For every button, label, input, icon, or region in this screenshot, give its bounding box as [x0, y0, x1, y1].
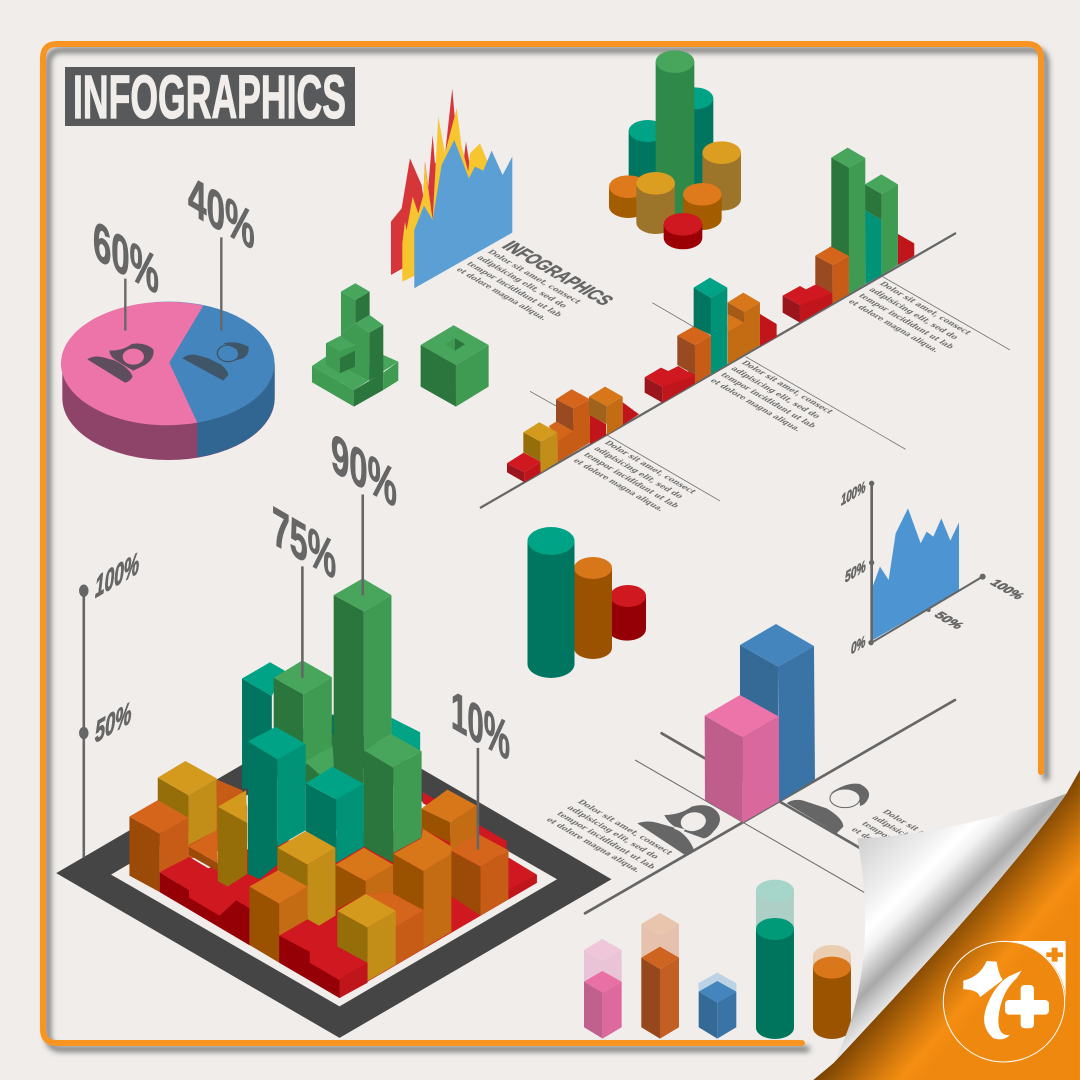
text block: man caption: et dolore magna aliqua.: [849, 826, 945, 882]
text block: infographics iso caption: INFOGRAPHICS: [497, 238, 618, 309]
left orange and yellow blocks: [129, 790, 264, 945]
label 60%: 60%: [93, 209, 159, 307]
axis lines: [585, 700, 955, 913]
label 10%: 10%: [451, 679, 510, 773]
bar set 1: [507, 387, 639, 482]
blue bar: [740, 624, 815, 803]
text block: set 2 caption: Dolor sit amet, consect: [739, 359, 836, 415]
title banner: INFOGRAPHICS: [73, 63, 346, 131]
cylinder trio: [528, 527, 646, 678]
icon: man: [787, 784, 869, 833]
text block: set 1 caption: et dolore magna aliqua.: [571, 457, 667, 513]
text block: man caption: adipisicing elit, sed do: [870, 814, 965, 869]
stick 75: [299, 566, 306, 678]
back blocks: [158, 662, 537, 998]
teal ghost cylinder: [756, 880, 794, 1039]
text block: infographics iso caption: Dolor sit amet, consect: [485, 248, 584, 305]
icon: woman on pie: [87, 343, 154, 383]
text block: infographics iso caption: adipisicing elit, sed do: [475, 254, 571, 309]
text block: man caption: tempor incididunt ut lab: [859, 820, 960, 878]
green 90 block: [334, 578, 391, 847]
title banner: [65, 63, 355, 131]
pink ghost bar: [584, 939, 622, 1039]
text block: set 2 caption: tempor incididunt ut lab: [718, 371, 819, 429]
dark base: [56, 714, 612, 1038]
text block: set 3 caption: [846, 280, 978, 356]
white inset: [111, 748, 557, 1006]
label 50% scale: 50%: [95, 696, 131, 750]
blue ghost bar: [698, 973, 736, 1039]
orange ghost cylinder: [813, 945, 851, 1039]
right orange blocks: [422, 790, 537, 916]
label 75%: 75%: [272, 495, 336, 592]
blue area chart: 100%: [841, 478, 866, 510]
text block: set 1 caption: [571, 439, 703, 515]
text block: set 3 caption: Dolor sit amet, consect: [877, 280, 974, 336]
blue area chart: [841, 478, 1028, 658]
text block: infographics iso caption: tempor incididunt ut lab: [464, 260, 565, 318]
stick 10: [474, 748, 481, 850]
pie top blue slice: [62, 302, 274, 425]
label 40%: 40%: [188, 164, 255, 263]
text block: woman caption: [544, 798, 679, 876]
text block: woman caption: tempor incididunt ut lab: [554, 810, 659, 870]
text block: set 3 caption: tempor incididunt ut lab: [856, 292, 957, 350]
text block: set 1 caption: Dolor sit amet, consect: [602, 439, 699, 495]
teal block center: [306, 767, 364, 863]
text block: set 3 caption: et dolore magna aliqua.: [846, 298, 942, 354]
label 100% scale: 100%: [95, 546, 139, 605]
text block: set 1 caption: adipisicing elit, sed do: [592, 445, 687, 500]
bar group row: [507, 148, 1010, 501]
text block: man caption: Dolor sit amet, consect: [880, 808, 977, 864]
page curl corner: [813, 770, 1080, 1080]
text block: set 2 caption: et dolore magna aliqua.: [708, 377, 804, 433]
pie top pink slice: [61, 302, 203, 425]
ghost bar row: [584, 880, 851, 1039]
thin guide lines: [530, 277, 1010, 501]
text block: set 3 caption: adipisicing elit, sed do: [867, 286, 962, 341]
green cube: [421, 325, 489, 407]
upper row axis line: [480, 233, 956, 508]
text block: woman caption: Dolor sit amet, consect: [575, 798, 676, 856]
green block front: [364, 734, 422, 863]
text block: set 2 caption: adipisicing elit, sed do: [729, 365, 824, 420]
blue area chart: 100%: [987, 577, 1028, 601]
pink bar: [705, 695, 779, 823]
text block: infographics iso caption: [454, 238, 618, 324]
green iso blocks: [312, 283, 489, 407]
text block: set 1 caption: tempor incididunt ut lab: [581, 451, 682, 509]
text block: woman caption: adipisicing elit, sed do: [565, 804, 662, 860]
blue area chart: 0%: [851, 633, 866, 658]
bar set 2: [645, 278, 777, 403]
blue area chart: 50%: [931, 610, 968, 631]
scale stick: [79, 585, 89, 858]
curled paper: [833, 793, 1067, 1063]
label 90%: 90%: [331, 422, 397, 520]
stick 90: [359, 495, 366, 595]
stick 60: [122, 279, 129, 331]
stick 40: [218, 237, 225, 331]
orange ghost bar: [641, 913, 679, 1039]
text block: set 2 caption: [708, 359, 840, 435]
pie chart: [61, 164, 275, 460]
mountain area chart: [391, 88, 512, 288]
green tower: [312, 283, 398, 407]
logo: [943, 941, 1066, 1062]
icon: woman: [637, 805, 720, 855]
text block: woman caption: et dolore magna aliqua.: [544, 816, 644, 874]
cylinder cluster: [609, 50, 741, 249]
text block: man caption: [849, 808, 981, 884]
teal block left: [248, 727, 306, 879]
pie side blue: [197, 363, 275, 457]
bar set 3: [783, 148, 914, 323]
green 75 block: [272, 660, 334, 785]
front red and yellow blocks: [279, 894, 396, 998]
orange revealed corner: [813, 770, 1080, 1080]
icon: man on pie: [182, 342, 249, 381]
center and front orange blocks: [249, 831, 451, 965]
blue area chart: 50%: [845, 558, 866, 587]
city bar chart: [56, 495, 612, 1038]
pie side: [62, 363, 275, 460]
text block: infographics iso caption: et dolore magna aliqua.: [454, 266, 550, 322]
person bar chart: [585, 624, 955, 913]
